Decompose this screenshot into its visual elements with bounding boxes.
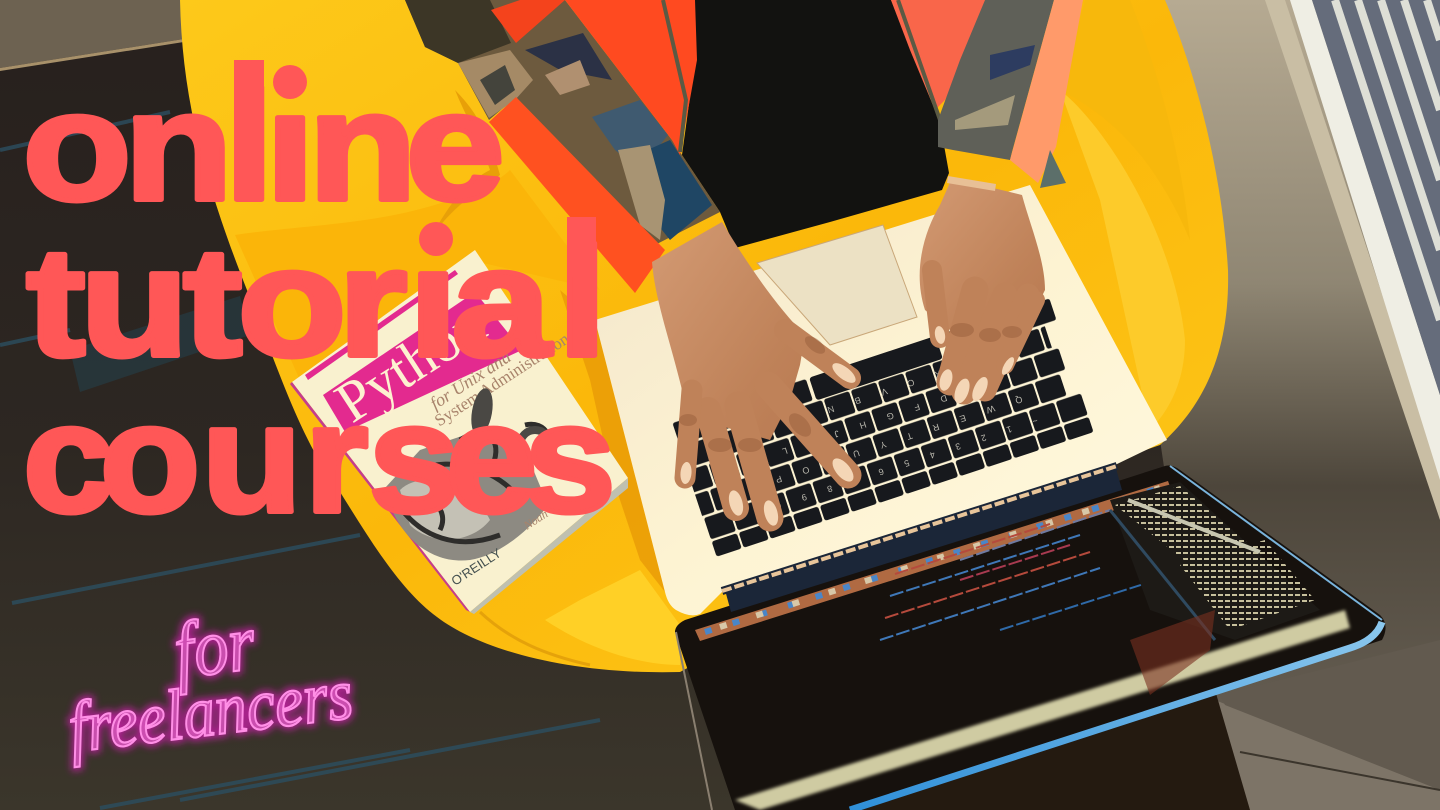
- book subtitle: for Unix and: [426, 346, 515, 413]
- left knuckles: [679, 333, 828, 452]
- hinge: [725, 465, 1122, 612]
- right orange panel: [891, 0, 985, 110]
- left orange panel: [565, 0, 697, 155]
- screen shell: [675, 466, 1386, 810]
- right hand: [920, 176, 1045, 405]
- title line: tutorial: tutorial: [26, 216, 607, 389]
- blue edge: [850, 622, 1382, 810]
- snake illustration: [385, 387, 550, 561]
- right fingers: [932, 270, 1036, 392]
- keyboard: [671, 297, 1095, 558]
- laptop on lap: [595, 185, 1167, 615]
- nails: [934, 325, 1016, 405]
- book publisher: O'REILLY: [448, 545, 504, 589]
- laptop speaker strip: [722, 466, 1117, 591]
- key labels: letter row three: ZXCVBNM: [777, 360, 968, 431]
- key labels: letter row two: ASDFGHJKL: [760, 375, 1001, 463]
- left hand: [652, 222, 859, 527]
- neon glow: [64, 599, 357, 768]
- neon glow: freelancers: [64, 654, 357, 768]
- trackpad: [757, 225, 917, 345]
- laptop base: [595, 185, 1167, 615]
- left zipper: [663, 0, 686, 152]
- title line: courses: courses: [23, 371, 616, 544]
- nails: [680, 360, 859, 527]
- bracelet: [947, 176, 996, 191]
- python book: [290, 250, 628, 614]
- book subtitle line two: System Administration: [431, 329, 573, 430]
- title: online tutorial courses: [23, 60, 616, 544]
- neon lines: freelancers: [64, 654, 357, 768]
- key labels: number row: ~1234567890: [754, 415, 1039, 518]
- neon glow: for: [169, 599, 260, 696]
- book author: Noah Gift: [520, 494, 569, 533]
- black shirt: [682, 0, 949, 248]
- book title band: Python: [324, 291, 497, 435]
- terminal panel: [1110, 482, 1320, 640]
- left camo sleeve: [405, 0, 720, 250]
- key labels: letter row one: QWERTYUIOP: [753, 394, 1024, 492]
- right zipper: [898, 0, 940, 120]
- window reflection band: [735, 610, 1350, 810]
- neon lines: [64, 599, 357, 768]
- wall and floor on the right: [840, 0, 1440, 810]
- dock menu bar: [695, 481, 1172, 641]
- orange sleeve stripe: [489, 97, 665, 293]
- right orange stripe: [1010, 0, 1083, 183]
- camo patches: [405, 0, 712, 240]
- second laptop open screen: [675, 466, 1386, 810]
- right camo sleeve: [938, 0, 1054, 160]
- title line: online: online: [23, 60, 505, 233]
- code lines: [880, 510, 1150, 640]
- right knuckles: [950, 323, 1022, 342]
- jacket: [405, 0, 1083, 293]
- neon subtitle: for freelancers: [64, 599, 357, 768]
- title letter tops: [234, 60, 596, 277]
- radiator vent: [1265, 0, 1440, 520]
- yellow chair: [180, 0, 1228, 672]
- left fingers: [685, 330, 850, 518]
- neon lines: for: [169, 599, 260, 696]
